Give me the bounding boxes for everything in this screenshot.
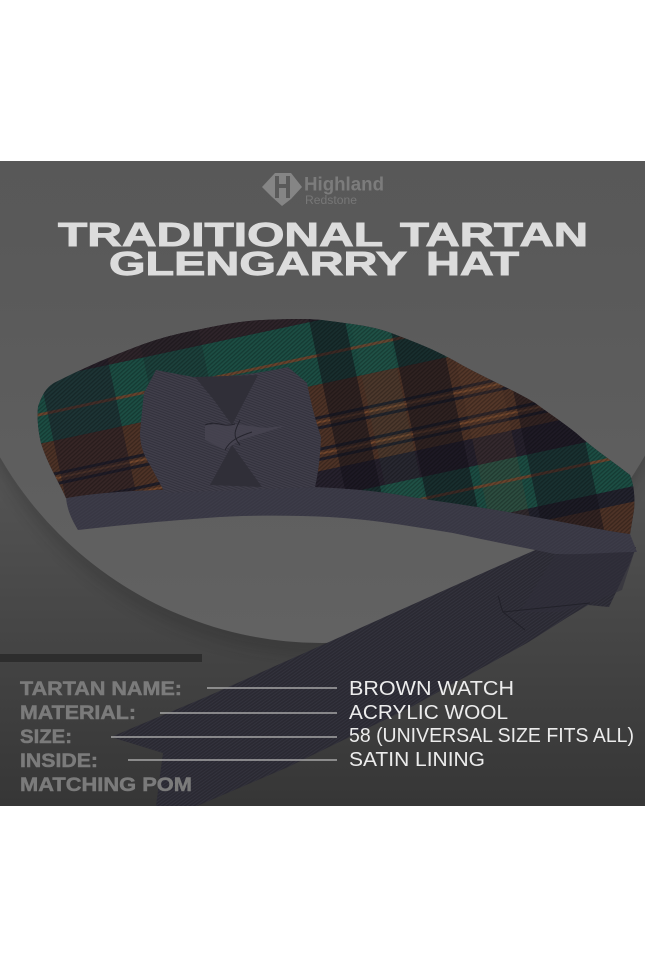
horizontal bands: [38, 320, 447, 444]
spec values: [349, 678, 634, 771]
logo subtext: Redstone: [305, 195, 357, 207]
hat brim band: [66, 487, 637, 554]
vertical bands: [44, 364, 136, 498]
title: TRADITIONAL: [58, 216, 383, 253]
logo wordmark: Highland: [304, 174, 384, 196]
hat tartan crown: [38, 319, 634, 534]
spec labels: INSIDE:: [20, 750, 98, 772]
title: GLENGARRY: [109, 245, 407, 282]
icon: diamond emblem: [262, 173, 302, 206]
spec labels: TARTAN NAME:: [20, 678, 182, 700]
title: TARTAN: [400, 216, 588, 253]
spec labels: SIZE:: [20, 726, 72, 748]
panel: dark background: [0, 161, 645, 806]
spec values: 58 (UNIVERSAL SIZE FITS ALL): [349, 725, 634, 747]
hat: [38, 319, 637, 554]
title: HAT: [426, 245, 519, 282]
divider bar: [0, 654, 202, 662]
spec values: ACRYLIC WOOL: [349, 702, 508, 724]
infographic: [0, 161, 645, 806]
spec labels: MATCHING POM: [20, 774, 192, 796]
title: [58, 216, 588, 282]
leader lines: [111, 688, 337, 760]
hat bow: [140, 367, 321, 493]
fine stripes: [38, 336, 405, 416]
spec labels: MATERIAL:: [20, 702, 136, 724]
logo: Highland Redstone: [262, 173, 384, 207]
spec values: BROWN WATCH: [349, 678, 514, 700]
spec values: SATIN LINING: [349, 749, 485, 771]
spec labels: [20, 678, 192, 796]
hat ribbon tail: [111, 547, 636, 806]
